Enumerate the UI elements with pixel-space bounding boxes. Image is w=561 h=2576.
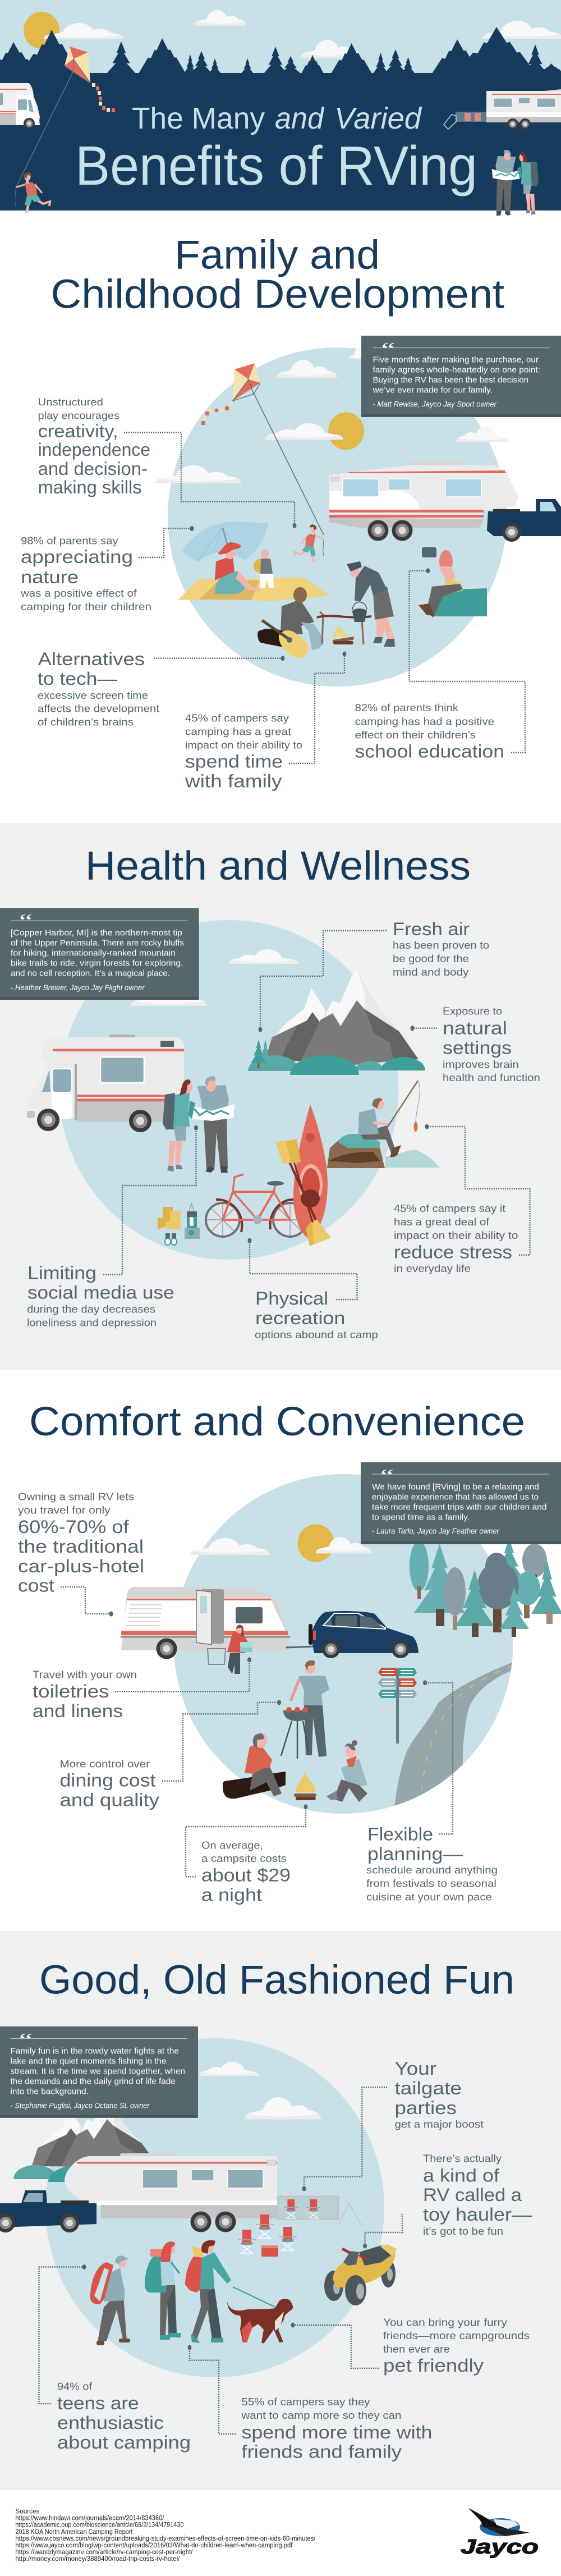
callout: alternatives to tech: affects the development bbox=[38, 703, 159, 715]
illustration: signpost bbox=[378, 1668, 417, 1744]
illustration: friends by campfire bbox=[223, 1732, 367, 1802]
teen hiker bbox=[90, 2255, 130, 2345]
callout: creativity: play encourages bbox=[38, 409, 119, 421]
illustration: travel trailer bbox=[121, 1587, 315, 1664]
callout: spend time with family bbox=[185, 651, 347, 791]
quote: the demands and the daily grind of life fade bbox=[10, 2077, 176, 2086]
quote: “ bbox=[380, 1465, 394, 1488]
quote: and no cell reception. It’s a magical place. bbox=[11, 969, 170, 978]
quote: bike trails to ride, virgin forests for exploring, bbox=[11, 959, 183, 968]
illustration: woman with linens bbox=[227, 1625, 252, 1674]
footer: sources: Sources bbox=[15, 2509, 40, 2515]
callout: pet friendly: then ever are bbox=[383, 2343, 450, 2355]
illustration: man with guitar bbox=[257, 587, 324, 658]
callout: reduce stress: impact on their ability to bbox=[394, 1229, 518, 1241]
callout: appreciating nature: appreciating bbox=[21, 547, 133, 567]
callout: flexible planning: planning— bbox=[367, 1843, 463, 1864]
quote: - Heather Brewer, Jayco Jay Flight owner bbox=[11, 983, 145, 992]
callout: spend time with family: with family bbox=[185, 771, 282, 791]
icon: kite bbox=[201, 363, 324, 535]
callout: toy hauler: it’s got to be fun bbox=[423, 2225, 503, 2237]
footer: sources: https://www.jayco.com/blog/wp-content/uploads/2016/03/What-do-children-learn-when-camping.pdf bbox=[15, 2542, 293, 2549]
callout: time with friends and family bbox=[187, 2345, 432, 2462]
callout: creativity: creativity, bbox=[38, 421, 118, 441]
illustration: fifth-wheel trailer bbox=[329, 462, 519, 541]
quote: - Laura Tarlo, Jayco Jay Feather owner bbox=[372, 1527, 499, 1535]
callout: school education: camping has had a positive bbox=[355, 716, 494, 727]
title bbox=[75, 102, 477, 196]
callout: time with friends and family: spend more time with bbox=[241, 2422, 432, 2442]
quote: “ bbox=[19, 910, 33, 932]
illustration: trailer with ramp bbox=[444, 89, 561, 130]
callout: cost versus car plus hotel: you travel for only bbox=[18, 1504, 111, 1516]
illustration: couple reading map bbox=[163, 1076, 234, 1173]
icon: clouds and sun bbox=[155, 348, 508, 483]
callout: dining cost and quality: More control over bbox=[59, 1758, 150, 1769]
illustration: bicycle bbox=[206, 1174, 307, 1237]
callout: tailgate parties: Your bbox=[395, 2058, 436, 2079]
title: The Many bbox=[132, 102, 265, 135]
callout: limiting social media use: social media use bbox=[27, 1282, 174, 1302]
callout: spend time with family: spend time bbox=[185, 752, 283, 772]
callout: teens enthusiastic: teens are bbox=[57, 2393, 139, 2413]
quote: enjoyable experience that has allowed us to bbox=[372, 1493, 539, 1502]
callout: physical recreation: recreation bbox=[255, 1308, 346, 1328]
callout: appreciating nature: 98% of parents say bbox=[21, 534, 118, 547]
callout: tailgate parties: get a major boost bbox=[395, 2119, 484, 2130]
quote: We have found [RVing] to be a relaxing and bbox=[372, 1483, 539, 1491]
callout: fresh air bbox=[258, 919, 489, 1032]
illustration: picnic family bbox=[178, 521, 329, 601]
callout: spend time with family: 45% of campers say bbox=[185, 712, 289, 724]
footer: sources: https://academic.oup.com/bioscience/article/68/2/134/4791430 bbox=[15, 2522, 183, 2529]
background circle bbox=[45, 2038, 384, 2377]
illustration: campfire and cooking pot bbox=[317, 602, 371, 644]
illustration: fifth-wheel trailer bbox=[65, 2153, 277, 2232]
callout: teens enthusiastic: 94% of bbox=[57, 2381, 93, 2392]
callout: flexible planning bbox=[366, 1680, 498, 1903]
callout: reduce stress: reduce stress bbox=[394, 1242, 512, 1262]
callout: school education: school education bbox=[355, 741, 504, 761]
illustration: couple reading map bbox=[492, 150, 539, 216]
callout: creativity: and decision- bbox=[38, 459, 148, 479]
quote: of the Upper Peninsula. There are rocky bluffs bbox=[11, 939, 184, 948]
callout: physical recreation: options abound at camp bbox=[255, 1329, 378, 1340]
callout: fresh air: mind and body bbox=[393, 966, 469, 978]
footer: sources bbox=[15, 2509, 316, 2563]
quote: Family fun is in the rowdy water fights at the bbox=[10, 2047, 179, 2056]
footer: sources: https://wandrlymagazine.com/article/rv-camping-cost-per-night/ bbox=[15, 2549, 193, 2556]
callout: limiting social media use bbox=[27, 1125, 198, 1328]
callout: reduce stress: 45% of campers say it bbox=[394, 1202, 505, 1214]
quote: take more frequent trips with our children and bbox=[372, 1503, 546, 1512]
illustration: car bbox=[309, 1611, 419, 1658]
callout: alternatives to tech: excessive screen time bbox=[38, 689, 148, 701]
illustration: quad ATV bbox=[324, 2244, 397, 2305]
illustration: child running bbox=[295, 524, 324, 562]
callout: alternatives to tech: to tech— bbox=[38, 669, 117, 689]
quote: family agrees whole-heartedly on one point: bbox=[373, 366, 540, 375]
callout: reduce stress: in everyday life bbox=[394, 1262, 471, 1274]
callout: reduce stress bbox=[394, 1124, 530, 1274]
callout: campsite cost bbox=[186, 1804, 307, 1905]
illustration: hikers with dog bbox=[90, 2240, 293, 2345]
callout: natural settings: health and function bbox=[443, 1072, 540, 1083]
illustration: man cooking bbox=[347, 561, 395, 647]
quote: Buying the RV has been the best decision bbox=[373, 376, 528, 385]
quote: - Matt Rewise, Jayco Jay Sport owner bbox=[373, 400, 496, 409]
callout: time with friends and family: 55% of campers say they bbox=[241, 2396, 370, 2408]
callout: pet friendly: You can bring your furry bbox=[383, 2317, 508, 2328]
callout: dining cost and quality: dining cost bbox=[59, 1770, 156, 1791]
illustration: photographer on rock bbox=[419, 547, 487, 617]
icon: clouds bbox=[44, 10, 561, 58]
illustration: fisherman on rock bbox=[327, 1081, 440, 1168]
callout: pet friendly bbox=[291, 2317, 530, 2376]
callout: cost versus car plus hotel: car-plus-hotel bbox=[18, 1556, 144, 1576]
callout: natural settings: improves brain bbox=[443, 1059, 519, 1070]
title: and bbox=[275, 102, 325, 135]
heading: Comfort and Convenience bbox=[29, 1399, 525, 1444]
illustration: ramp of toy hauler bbox=[277, 2197, 362, 2226]
callout: creativity: Unstructured bbox=[38, 396, 103, 408]
logo: Jayco: Jayco bbox=[461, 2535, 539, 2558]
callout: natural settings: Exposure to bbox=[443, 1005, 502, 1017]
callout: alternatives to tech bbox=[38, 649, 285, 728]
footer: sources: http://money.com/money/3889400/road-trip-costs-rv-hotel/ bbox=[15, 2556, 180, 2563]
callout: school education: 82% of parents think bbox=[355, 702, 459, 713]
callout: alternatives to tech: of children’s brains bbox=[38, 716, 134, 728]
callout: fresh air: be good for the bbox=[393, 953, 469, 964]
background circle bbox=[174, 1474, 513, 1814]
callout: natural settings bbox=[411, 1005, 540, 1083]
callout: toy hauler: toy hauler— bbox=[423, 2204, 532, 2225]
callout: dining cost and quality: and quality bbox=[59, 1790, 159, 1810]
heading: Family and bbox=[174, 232, 380, 277]
panel: header banner bbox=[0, 0, 561, 216]
callout: flexible planning: cuisine at your own pace bbox=[366, 1891, 492, 1903]
callout: teens enthusiastic: about camping bbox=[57, 2432, 191, 2453]
panel: comfort and convenience bbox=[18, 1399, 561, 1905]
callout: appreciating nature: nature bbox=[21, 567, 79, 587]
callout: toy hauler bbox=[363, 2153, 532, 2249]
illustration: pickup truck bbox=[0, 2190, 96, 2232]
callout: time with friends and family: friends and family bbox=[241, 2442, 402, 2462]
heading: Childhood Development bbox=[50, 272, 504, 317]
icon: sun and clouds bbox=[190, 1524, 372, 1562]
heading: Health and Wellness bbox=[85, 844, 471, 889]
illustration: boots, lantern and binoculars bbox=[158, 1204, 200, 1245]
callout: alternatives to tech: Alternatives bbox=[38, 649, 145, 669]
quote bbox=[0, 908, 199, 1000]
footer: sources: 2018 KOA North American Camping Report bbox=[15, 2529, 133, 2536]
title: Varied bbox=[334, 102, 422, 135]
callout: appreciating nature bbox=[20, 526, 194, 612]
callout: natural settings: settings bbox=[443, 1037, 512, 1058]
callout: reduce stress: has a great deal of bbox=[394, 1216, 490, 1228]
callout: fresh air: has been proven to bbox=[393, 939, 489, 951]
callout: limiting social media use: Limiting bbox=[27, 1262, 96, 1283]
woman hiker bbox=[145, 2241, 181, 2340]
callout: appreciating nature: was a positive effect of bbox=[20, 587, 137, 599]
quote bbox=[0, 2026, 198, 2118]
callout: dining cost and quality bbox=[59, 1700, 281, 1810]
man hiker bbox=[185, 2240, 279, 2343]
callout: school education: effect on their children’s bbox=[355, 729, 476, 741]
illustration: mountains bbox=[248, 970, 425, 1075]
callout: spend time with family: camping has a great bbox=[185, 726, 291, 738]
title: Benefits of RVing bbox=[75, 135, 477, 196]
quote: to spend time as a family. bbox=[372, 1513, 470, 1522]
panel: good, old fashioned fun bbox=[0, 1931, 561, 2490]
quote: [Copper Harbor, MI] is the northern-most tip bbox=[11, 929, 182, 938]
illustration: camp chairs and cooler bbox=[238, 2214, 297, 2257]
quote: lake and the quiet moments fishing in the bbox=[10, 2057, 166, 2066]
callout: teens enthusiastic bbox=[39, 2264, 191, 2453]
callout: cost versus car plus hotel bbox=[18, 1491, 144, 1617]
callout: cost versus car plus hotel: Owning a small RV lets bbox=[18, 1491, 134, 1503]
callout: physical recreation: Physical bbox=[255, 1288, 328, 1308]
callout: toy hauler: There’s actually bbox=[423, 2153, 502, 2165]
logo: Jayco bbox=[461, 2508, 539, 2558]
callout: toy hauler: a kind of bbox=[423, 2166, 499, 2186]
callout: flexible planning: Flexible bbox=[367, 1824, 433, 1844]
callout: creativity: making skills bbox=[38, 477, 142, 497]
illustration: man grilling bbox=[281, 1660, 329, 1759]
footer: sources: https://www.cbsnews.com/news/groundbreaking-study-examines-effects-of-screen-time-on-kids-60-minutes/ bbox=[15, 2536, 316, 2542]
illustration: child running bbox=[15, 172, 50, 213]
callout: school education bbox=[355, 568, 525, 761]
callout: toy hauler: RV called a bbox=[423, 2185, 522, 2205]
quote: for hiking, internationally-ranked mountain bbox=[11, 949, 176, 958]
callout: time with friends and family: want to camp more so they can bbox=[241, 2409, 402, 2421]
callout: limiting social media use: during the day decreases bbox=[27, 1303, 155, 1315]
callout: toiletries and linens: Travel with your own bbox=[33, 1668, 137, 1680]
callout: cost versus car plus hotel: the traditional bbox=[18, 1536, 144, 1557]
quote: stream. It is the time we spend together, when bbox=[10, 2067, 185, 2076]
callout: natural settings: natural bbox=[443, 1018, 507, 1038]
callout: creativity bbox=[38, 396, 296, 528]
quote: we’ve ever made for our family. bbox=[372, 386, 493, 395]
illustration: road and signpost bbox=[394, 1663, 512, 1806]
background circle bbox=[59, 920, 398, 1260]
callout: physical recreation bbox=[248, 1238, 378, 1340]
dog bbox=[227, 2299, 293, 2344]
callout: toiletries and linens: and linens bbox=[33, 1701, 123, 1721]
tree line bbox=[0, 27, 561, 74]
callout: campsite cost: a night bbox=[201, 1885, 262, 1905]
illustration: motorhome, left bbox=[0, 83, 40, 129]
quote: into the background. bbox=[10, 2087, 89, 2096]
callout: toiletries and linens bbox=[33, 1657, 251, 1721]
callout: fresh air: Fresh air bbox=[393, 919, 470, 939]
callout: tailgate parties: tailgate bbox=[395, 2078, 462, 2098]
icon: sun bbox=[24, 12, 59, 49]
callout: cost versus car plus hotel: cost bbox=[18, 1576, 54, 1596]
illustration: mountains and hills bbox=[13, 2095, 158, 2182]
callout: campsite cost: a campsite costs bbox=[201, 1852, 287, 1864]
illustration: kayak and paddle bbox=[275, 1104, 331, 1246]
illustration: forest bbox=[410, 1538, 561, 1637]
callout: pet friendly: friends—more campgrounds bbox=[383, 2330, 530, 2341]
icon: clouds bbox=[131, 949, 298, 1006]
callout: pet friendly: pet friendly bbox=[383, 2355, 484, 2376]
footer: sources: https://www.hindawi.com/journals/ecam/2014/834360/ bbox=[15, 2515, 164, 2522]
callout: tailgate parties: parties bbox=[395, 2098, 457, 2118]
background circle bbox=[168, 347, 507, 687]
icon: kite bbox=[16, 47, 115, 187]
quote bbox=[361, 336, 561, 417]
callout: limiting social media use: loneliness and depression bbox=[27, 1316, 157, 1328]
callout: spend time with family: impact on their ability to bbox=[185, 739, 302, 751]
callout: tailgate parties bbox=[302, 2058, 484, 2191]
callout: appreciating nature: camping for their children bbox=[21, 601, 151, 612]
panel: family and childhood development bbox=[20, 232, 561, 791]
quote: “ bbox=[381, 338, 395, 361]
quote bbox=[361, 1462, 561, 1544]
callout: creativity: independence bbox=[38, 440, 150, 460]
callout: flexible planning: from festivals to seasonal bbox=[366, 1878, 496, 1889]
callout: campsite cost: about $29 bbox=[201, 1865, 291, 1886]
quote: “ bbox=[19, 2029, 33, 2052]
heading bbox=[50, 232, 504, 317]
callout: toiletries and linens: toiletries bbox=[33, 1681, 109, 1701]
illustration: motorhome bbox=[27, 1035, 184, 1132]
illustration: hills bbox=[248, 1040, 425, 1075]
icon: clouds bbox=[199, 2062, 321, 2119]
quote: - Stephanie Puglisi, Jayco Octane SL owner bbox=[10, 2102, 150, 2110]
illustration: pickup truck bbox=[487, 499, 561, 542]
callout: teens enthusiastic: enthusiastic bbox=[57, 2413, 164, 2433]
callout: cost versus car plus hotel: 60%-70% of bbox=[18, 1517, 129, 1537]
callout: flexible planning: schedule around anything bbox=[366, 1864, 498, 1876]
callout: campsite cost: On average, bbox=[201, 1839, 263, 1851]
heading: Good, Old Fashioned Fun bbox=[39, 1958, 514, 2003]
panel: health and wellness bbox=[0, 823, 561, 1370]
quote: Five months after making the purchase, our bbox=[373, 356, 539, 365]
